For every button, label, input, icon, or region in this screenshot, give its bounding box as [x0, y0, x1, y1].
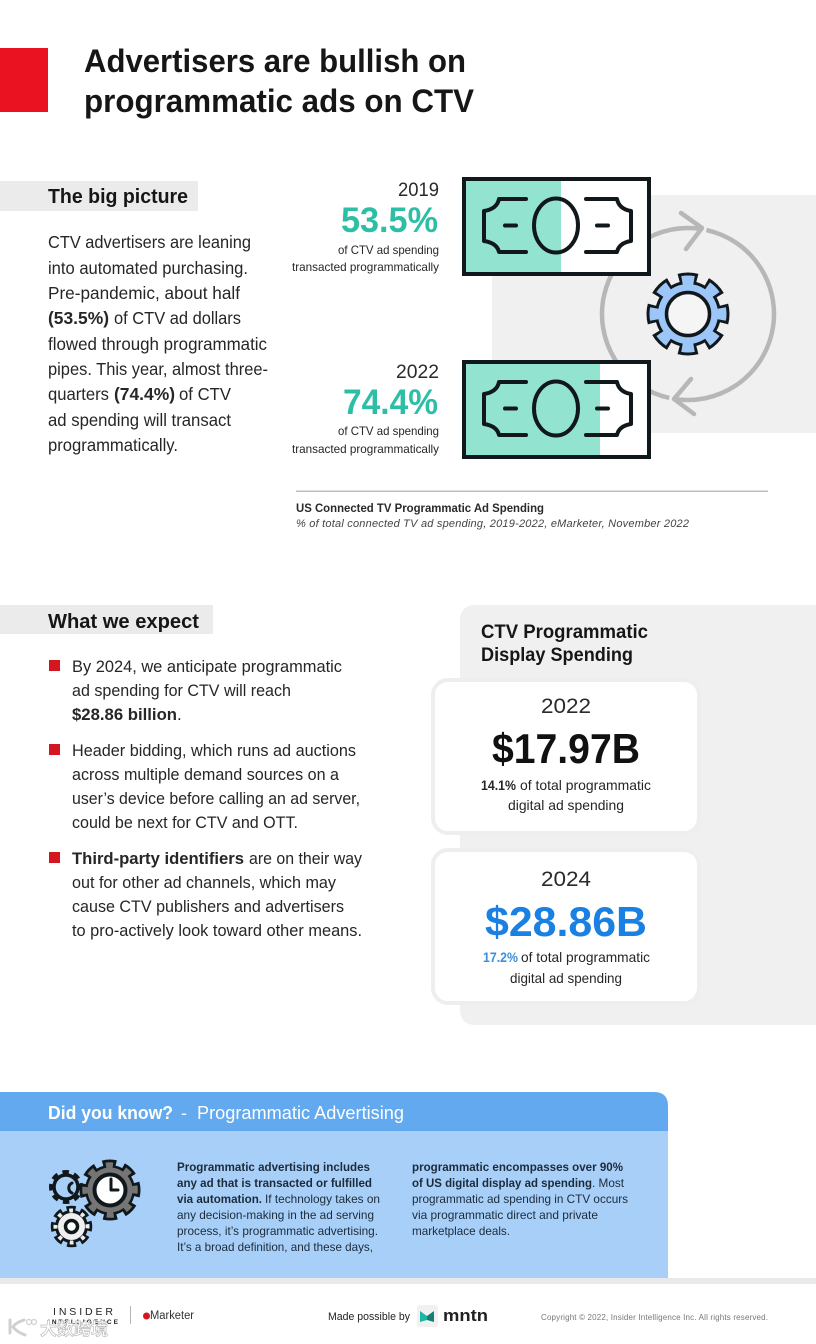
icon: gears with clock	[52, 1164, 136, 1244]
did you know text, right column	[412, 1160, 628, 1238]
did you know text, left column: via automation.	[177, 1192, 262, 1206]
card: 2022: 2022	[541, 695, 591, 718]
bullet two: Header bidding, which runs ad auctions	[72, 741, 356, 760]
logo: Insider Intelligence: INTELLIGENCE	[48, 1319, 119, 1326]
heading: the big picture	[0, 181, 198, 211]
panel: grey backdrop behind cycle	[492, 195, 816, 433]
footer strip	[0, 1278, 816, 1284]
text block: big picture paragraph: programmatically.	[48, 435, 178, 455]
did you know text, right column: via programmatic direct and private	[412, 1208, 598, 1222]
title: programmatic ads on CTV	[84, 83, 475, 119]
card: 2022: 14.1%	[481, 777, 516, 793]
text block: big picture paragraph: of CTV ad dollars	[114, 308, 241, 328]
stat: 2022	[292, 362, 439, 456]
bullet two: across multiple demand sources on a	[72, 765, 340, 784]
bullet three	[49, 849, 362, 940]
bullet one: By 2024, we anticipate programmatic	[72, 657, 342, 676]
stat: 2022: 74.4%	[343, 383, 438, 422]
did you know heading: -	[181, 1103, 187, 1123]
copyright: Copyright © 2022, Insider Intelligence Inc. All rights reserved.	[541, 1313, 768, 1322]
bullet one: ad spending for CTV will reach	[72, 681, 291, 700]
text block: big picture paragraph: CTV advertisers are leaning	[48, 232, 251, 252]
text block: big picture paragraph: ad spending will transact	[48, 410, 231, 430]
divider	[130, 1306, 131, 1324]
logo: Insider Intelligence	[48, 1306, 119, 1326]
bullet three: to pro-actively look toward other means.	[72, 921, 362, 940]
title	[84, 43, 475, 119]
did you know text, right column: of US digital display ad spending	[412, 1176, 592, 1190]
did you know text, left column: It’s a broad definition, and these days,	[177, 1240, 373, 1254]
bullet three: out for other ad channels, which may	[72, 873, 336, 892]
sponsor: made possible by mntn: Made possible by	[328, 1311, 410, 1323]
panel: did you know	[0, 1092, 668, 1278]
bullet two: could be next for CTV and OTT.	[72, 813, 298, 832]
heading: the big picture: The big picture	[48, 186, 188, 208]
card: 2024: 2024	[541, 868, 591, 891]
chart source note: % of total connected TV ad spending, 2019-2022, eMarketer, November 2022	[296, 518, 689, 530]
stat: 2022: of CTV ad spending	[338, 424, 439, 438]
text block: big picture paragraph: pipes. This year, almost three-	[48, 359, 268, 379]
left outline gear	[52, 1172, 80, 1202]
icon: banknote 74.4% filled	[464, 362, 649, 457]
did you know text, right column: . Most	[592, 1176, 625, 1190]
text block: big picture paragraph: quarters	[48, 384, 109, 404]
text block: big picture paragraph	[48, 232, 268, 455]
logo: eMarketer: Marketer	[150, 1310, 194, 1322]
stat: 2019: 53.5%	[341, 201, 438, 240]
icon: gear	[652, 278, 724, 350]
chart source note: US Connected TV Programmatic Ad Spending	[296, 501, 544, 515]
did you know text, right column: marketplace deals.	[412, 1224, 510, 1238]
text block: big picture paragraph: Pre-pandemic, about half	[48, 283, 240, 303]
card: 2024: 17.2%	[483, 949, 518, 965]
red accent block	[0, 48, 48, 112]
card: 2022: of total programmatic	[520, 777, 651, 793]
title: Advertisers are bullish on	[84, 43, 466, 79]
did you know text, left column: any ad that is transacted or fulfilled	[177, 1176, 372, 1190]
panel heading	[481, 622, 648, 666]
bullet one: .	[177, 705, 182, 724]
did you know text, left column	[177, 1160, 380, 1254]
card: 2022: $17.97B	[492, 725, 640, 772]
bullet three: cause CTV publishers and advertisers	[72, 897, 344, 916]
did you know text, left column: Programmatic advertising includes	[177, 1160, 370, 1174]
watermark	[10, 1319, 108, 1339]
text block: big picture paragraph: flowed through programmatic	[48, 334, 267, 354]
small light gear	[54, 1210, 88, 1244]
text block: big picture paragraph: (74.4%)	[114, 384, 175, 404]
did you know heading: Did you know?	[48, 1103, 173, 1123]
bullet three: are on their way	[249, 849, 362, 868]
bullet list: expectations	[49, 657, 362, 940]
card: 2024	[433, 850, 699, 1003]
chart source note	[296, 490, 768, 530]
heading: what we expect	[0, 605, 213, 634]
watermark: 大数跨境	[40, 1319, 108, 1339]
did you know heading: Programmatic Advertising	[197, 1103, 404, 1123]
card: 2024: $28.86B	[485, 898, 647, 945]
text block: big picture paragraph: of CTV	[179, 384, 231, 404]
panel heading: CTV Programmatic	[481, 622, 648, 643]
bullet one: $28.86 billion	[72, 705, 177, 724]
sponsor: made possible by mntn: mntn	[443, 1306, 488, 1325]
heading: what we expect: What we expect	[48, 611, 199, 633]
panel: CTV programmatic display spending	[433, 605, 816, 1025]
stat: 2022: transacted programmatically	[292, 442, 439, 456]
stat: 2019: 2019	[398, 180, 439, 201]
stat: 2019	[292, 180, 439, 274]
bullet two	[49, 741, 360, 832]
did you know text, right column: programmatic ad spending in CTV occurs	[412, 1192, 628, 1206]
bullet three: Third-party identifiers	[72, 849, 244, 868]
panel heading: Display Spending	[481, 645, 633, 666]
card: 2022: digital ad spending	[508, 797, 624, 813]
did you know heading	[48, 1103, 404, 1123]
stat: 2022: 2022	[396, 362, 439, 383]
card: 2024: of total programmatic	[521, 949, 650, 965]
did you know text, right column: programmatic encompasses over 90%	[412, 1160, 623, 1174]
text block: big picture paragraph: (53.5%)	[48, 308, 109, 328]
bullet two: user’s device before calling an ad server,	[72, 789, 360, 808]
card: 2024: digital ad spending	[510, 970, 622, 986]
stat: 2019: transacted programmatically	[292, 260, 439, 274]
did you know text, left column: any decision-making in the ad serving	[177, 1208, 374, 1222]
bullet one	[49, 657, 342, 724]
did you know text, left column: process, it’s programmatic advertising.	[177, 1224, 378, 1238]
stat: 2019: of CTV ad spending	[338, 243, 439, 257]
sponsor: made possible by mntn	[328, 1305, 488, 1327]
icon: circular arrows	[585, 211, 791, 417]
card: 2022	[433, 680, 699, 833]
text block: big picture paragraph: into automated purchasing.	[48, 258, 248, 278]
icon: banknote 53.5% filled	[464, 179, 649, 274]
big gear	[84, 1164, 136, 1216]
logo: Insider Intelligence: INSIDER	[53, 1306, 113, 1318]
did you know text, left column: If technology takes on	[265, 1192, 380, 1206]
